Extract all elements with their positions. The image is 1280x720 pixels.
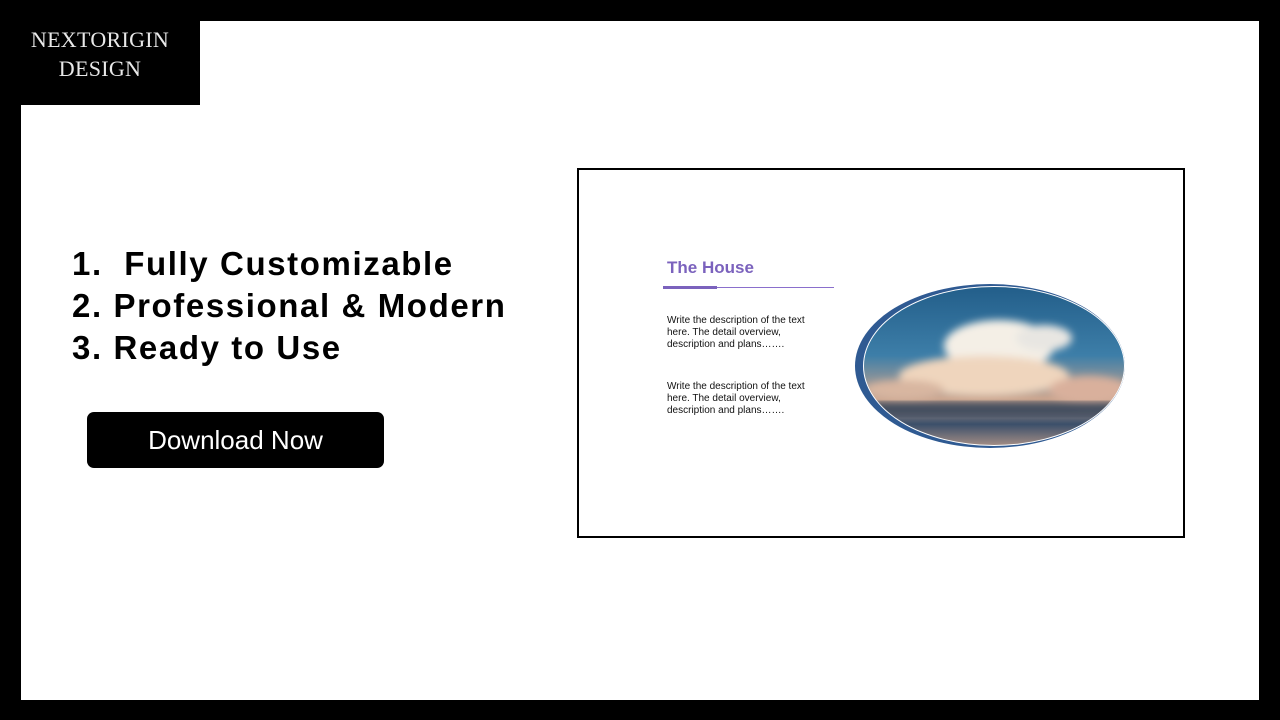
title underline (663, 287, 834, 288)
logo box (0, 0, 200, 105)
description 2: here. The detail overview, (667, 393, 781, 404)
description 2 (667, 381, 805, 416)
cloud ellipse image (855, 284, 1125, 448)
download button: Download Now (148, 425, 323, 455)
description 1 (667, 315, 805, 350)
logo box: NEXTORIGIN (31, 27, 169, 52)
download button (87, 412, 384, 468)
description 2: Write the description of the text (667, 381, 805, 392)
feature list: 3. Ready to Use (72, 329, 342, 366)
feature list: 2. Professional & Modern (72, 287, 506, 324)
slide preview panel (577, 168, 1185, 538)
feature list (72, 245, 506, 366)
description 1: description and plans……. (667, 339, 784, 350)
description 2: description and plans……. (667, 405, 784, 416)
description 1: Write the description of the text (667, 315, 805, 326)
feature list: 1. Fully Customizable (72, 245, 454, 282)
description 1: here. The detail overview, (667, 327, 781, 338)
logo box: DESIGN (59, 56, 141, 81)
slide title: The House (667, 258, 754, 277)
